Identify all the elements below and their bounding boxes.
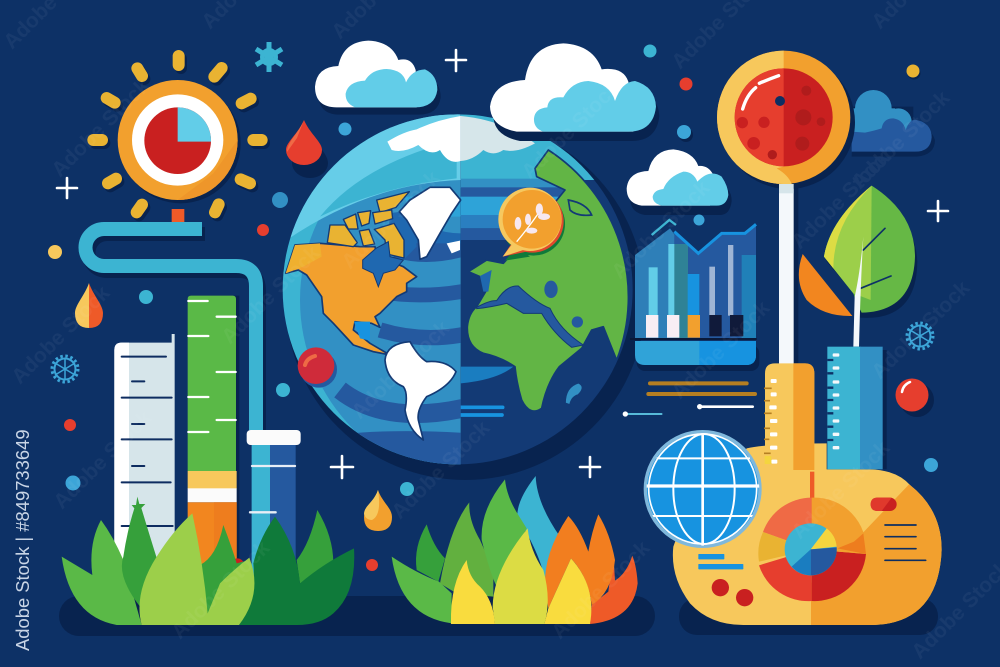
cloud: small white [627,149,732,215]
watermark: Adobe Stock [387,416,495,524]
bar chart with tray [630,220,759,371]
stock id credit: Adobe Stock | #849733649 [12,429,33,651]
watermark: Adobe Stock [667,296,775,404]
icon: gear snowflake left [52,356,78,382]
watermark: Adobe Stock [847,86,955,194]
red marble [298,347,337,388]
watermark: Adobe Stock [7,281,115,389]
thermometer bulb [764,363,814,470]
icon: sun gauge with pie chart [93,56,264,222]
cloud: blue background [852,90,935,157]
device indicator and text lines [698,498,926,606]
globe: eastern hemisphere ocean [460,114,633,464]
red ball [896,378,934,417]
watermark: Adobe Stock [517,76,625,184]
pipe [86,229,259,435]
small decorative dots [48,44,938,571]
small blue test tube [247,430,301,583]
blue graduated tube [827,347,887,469]
Eurasia and Africa [467,150,628,411]
magnifier with red dial [717,51,855,189]
Greenland [399,187,461,259]
watermark: Adobe Stock [47,74,155,182]
body: yellow analyser device with dials [645,347,947,627]
icon: wireframe globe [645,432,760,547]
watermark: Adobe Stock [867,276,975,384]
North America [286,243,417,355]
chart caption lines [623,383,755,417]
flame and leaf cluster [392,476,638,624]
ground shadow: left and centre [59,596,655,636]
watermark: Adobe Stock [167,536,275,644]
green graduated tube [188,296,239,566]
icon: snowflake top [256,42,282,72]
watermark: Adobe Stock [607,176,715,284]
icon: red water drop [286,120,328,178]
ground shadow: right [679,598,938,635]
icon: location badge with sprig [498,188,565,261]
watermark: Adobe Stock [547,536,655,644]
globe: western hemisphere ocean [282,114,633,464]
donut chart [758,498,866,601]
watermark: Adobe Stock [49,406,157,514]
cloud: top centre [490,43,659,141]
Hudson Bay [363,242,403,287]
white measuring cylinder [114,334,175,563]
right column clouds, magnifier, chart and leaf [623,51,935,417]
South America [385,342,456,440]
globe [282,114,641,480]
cloud: top left [315,41,441,115]
icon: orange split drop [75,283,103,328]
watermark: Adobe Stock [347,316,455,424]
top clouds [315,41,659,141]
thermometer stem [794,187,798,363]
grass cluster [62,497,354,625]
watermark: Adobe Stock [337,166,445,274]
icon: yellow drop [364,490,392,531]
watermark: Adobe Stock [787,146,895,254]
watermark: Adobe Stock [217,241,325,349]
polar ice cap [387,116,535,162]
plus signs [57,50,948,478]
leaf [799,186,917,347]
Arctic islands [327,192,409,258]
icon: gear snowflake right [907,323,933,349]
watermark: Adobe Stock [787,436,895,544]
Canadian straits backdrop [387,210,417,260]
